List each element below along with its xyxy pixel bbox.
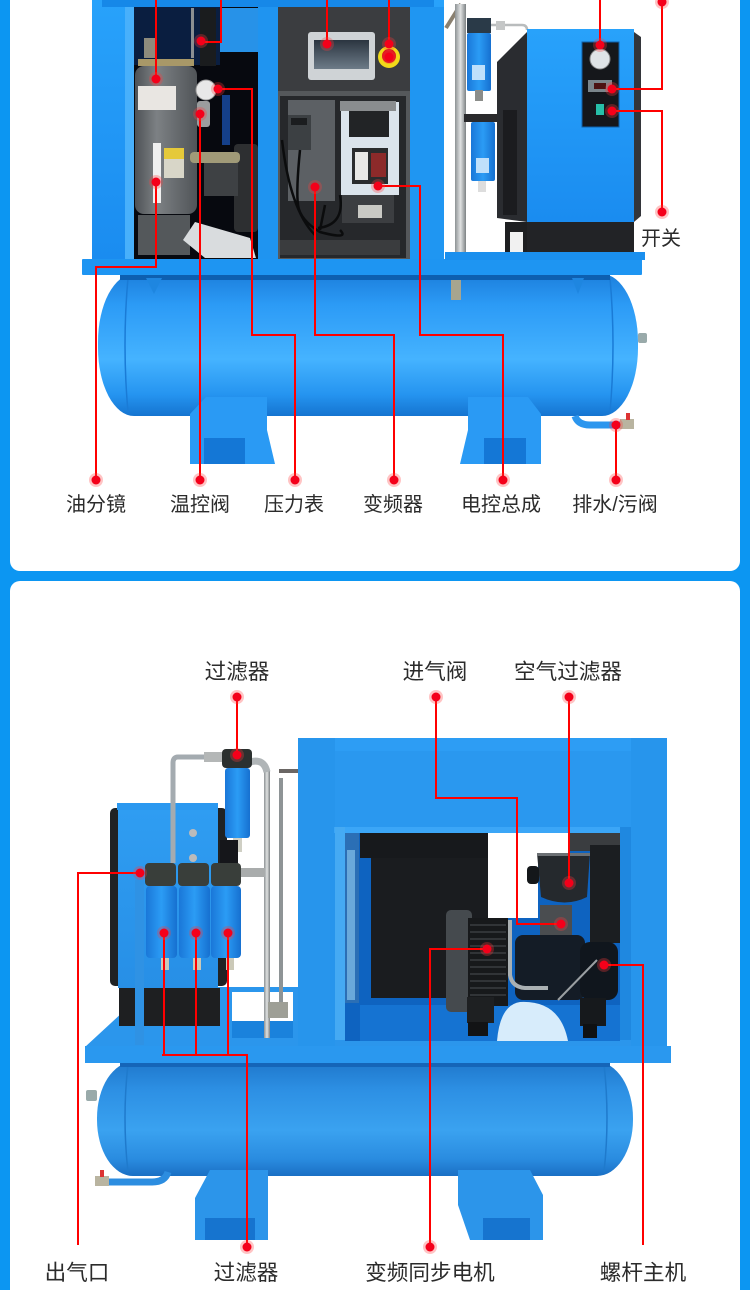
synchronous motor [446, 910, 508, 1036]
labels: bottom machine: 过滤器 [205, 659, 269, 684]
compressor cabinet [92, 0, 444, 260]
panel: top machine card [10, 0, 740, 571]
pressure gauge and thermostatic valve [190, 80, 240, 163]
callout lines: bottom machine [78, 697, 643, 1247]
oil separator vessel [135, 38, 197, 255]
callout dots: top machine [89, 0, 669, 487]
labels: top machine: 开关 [641, 227, 681, 250]
dryer control panel [582, 42, 619, 127]
labels: bottom machine: 出气口 [45, 1260, 109, 1285]
piping [173, 752, 298, 1038]
labels: top machine: 电控总成 [461, 493, 541, 516]
foot: left support [190, 397, 275, 464]
labels: top machine: 排水/污阀 [572, 493, 658, 516]
tank: bottom air receiver [86, 1062, 633, 1176]
foot: right support [460, 397, 541, 464]
filters: three in a row [145, 863, 241, 970]
cabinet interior [345, 833, 620, 1041]
air filter housing [527, 853, 590, 902]
base plate [85, 1046, 671, 1063]
base floor [85, 987, 298, 1047]
labels: top machine: 温控阀 [170, 493, 230, 516]
base plate [82, 252, 645, 275]
labels: top machine [66, 227, 681, 516]
callout lines: top machine [96, 0, 662, 480]
panel: bottom machine card [10, 581, 740, 1290]
labels: top machine: 油分镜 [66, 493, 126, 516]
callout dots: bottom machine [133, 690, 611, 1254]
emergency stop [378, 46, 400, 68]
labels: bottom machine: 变频同步电机 [365, 1260, 495, 1285]
black inner panel [371, 858, 488, 998]
compressor cabinet side [298, 738, 667, 1047]
dryer unit [497, 29, 641, 260]
drain pipe [575, 413, 634, 429]
labels: bottom machine [45, 659, 687, 1285]
filter: top [220, 749, 252, 865]
control panel top [278, 7, 410, 91]
flywheel [234, 144, 258, 232]
electrical compartment [278, 91, 410, 259]
labels: bottom machine: 空气过滤器 [514, 659, 622, 684]
labels: bottom machine: 螺杆主机 [600, 1260, 687, 1285]
tank: top air receiver [98, 274, 647, 416]
drain pipe [95, 1170, 168, 1186]
labels: top machine: 压力表 [264, 493, 324, 516]
foot: right support [458, 1170, 543, 1240]
screw air end [510, 920, 618, 1038]
silver pipe and filters [446, 4, 527, 260]
labels: bottom machine: 过滤器 [214, 1260, 278, 1285]
intake valve [540, 905, 572, 943]
labels: top machine: 变频器 [363, 493, 423, 516]
touch screen [308, 32, 375, 80]
dryer unit rear view [110, 803, 227, 1045]
foot: left support [195, 1170, 268, 1240]
labels: bottom machine: 进气阀 [403, 659, 467, 684]
